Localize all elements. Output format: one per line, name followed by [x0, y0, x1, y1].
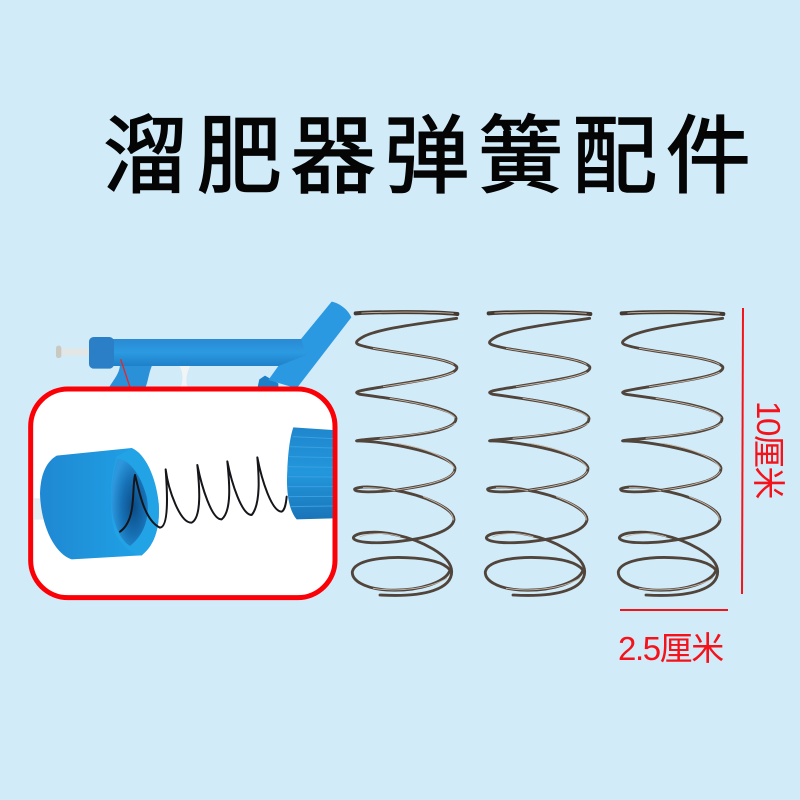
width dimension line — [620, 609, 728, 611]
spring 2 — [485, 312, 590, 595]
plunger rod — [56, 346, 90, 358]
Y branch — [268, 302, 351, 388]
white trigger — [179, 366, 190, 387]
handle — [108, 364, 153, 388]
icon: blue fertilizer applicator gun — [56, 302, 351, 388]
side stub — [257, 376, 278, 388]
blue threaded barrel — [287, 427, 333, 519]
blue threaded cap — [40, 448, 159, 559]
end cap — [89, 337, 114, 369]
height label: 10厘米 — [750, 401, 787, 499]
height dimension line — [742, 308, 743, 594]
width label: 2.5厘米 — [618, 630, 723, 667]
main tube — [112, 339, 307, 366]
red pointer line — [121, 359, 130, 387]
spring 1 — [352, 312, 457, 595]
title: 溜肥器弹簧配件 — [103, 110, 760, 205]
spring 3 — [618, 312, 723, 595]
panel: red rounded zoom callout — [31, 389, 335, 598]
white rod stub — [33, 498, 47, 520]
black spring — [120, 457, 287, 532]
